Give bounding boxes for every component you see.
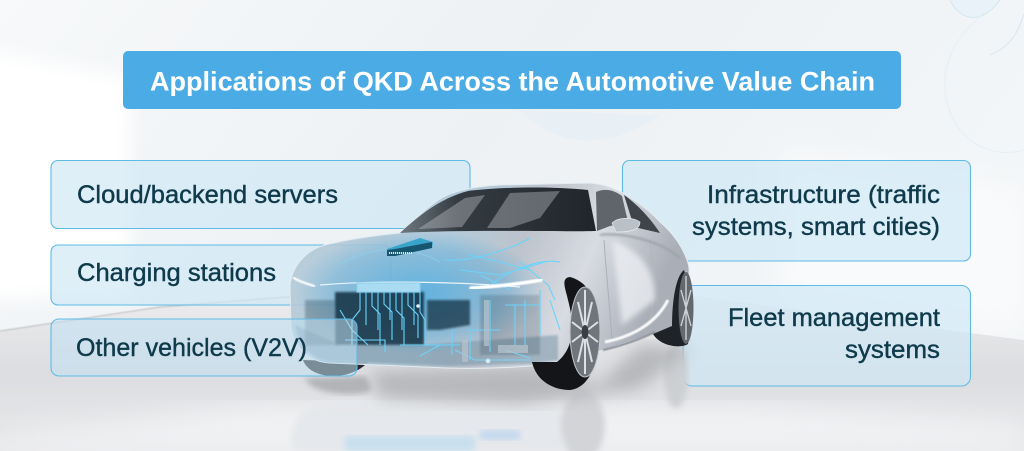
- panel: fleet management systems: Fleet management: [728, 304, 940, 332]
- car shadow: [370, 345, 690, 405]
- sparkle lights: [416, 304, 490, 363]
- icon: front wheel: [532, 277, 600, 390]
- windshield: [400, 187, 596, 233]
- panel: infrastructure: [622, 160, 970, 261]
- panel: charging stations: Charging stations: [77, 259, 276, 287]
- lower bumper shading: [295, 325, 558, 366]
- grey mechanical blocks: [462, 300, 528, 362]
- car: [290, 183, 694, 405]
- title banner: Applications of QKD Across the Automotive Value Chain: [150, 66, 875, 96]
- side windows: [596, 190, 660, 233]
- panel: infrastructure: systems, smart cities): [692, 213, 940, 241]
- panel: other vehicles (V2V): [51, 319, 357, 376]
- icon: microchip on hood: [387, 238, 433, 256]
- panel: cloud/backend servers: Cloud/backend servers: [77, 181, 338, 209]
- panel: charging stations: [51, 245, 391, 305]
- panel: infrastructure: Infrastructure (traffic: [707, 181, 940, 209]
- panel: other vehicles (V2V): Other vehicles (V2V): [76, 334, 307, 362]
- circuit glow: [295, 230, 545, 354]
- hood highlight: [320, 282, 520, 287]
- icon: rear wheel: [653, 270, 694, 346]
- headlights: [294, 278, 541, 288]
- car body: [290, 183, 689, 368]
- side door highlights: [600, 234, 680, 350]
- title banner: [123, 51, 901, 109]
- panel: fleet management systems: systems: [845, 336, 940, 364]
- windshield interior reflections: [418, 191, 560, 229]
- icon: front-left wheel: [303, 360, 368, 376]
- icon: side mirror: [612, 218, 640, 232]
- panel: fleet management systems: [683, 286, 970, 386]
- decorative swirl: top right: [945, 0, 1024, 152]
- car reflection on floor: [292, 344, 688, 451]
- panel: cloud/backend servers: [51, 160, 470, 228]
- icon: glowing circuit traces: [340, 238, 560, 360]
- engine dark block: [305, 292, 540, 355]
